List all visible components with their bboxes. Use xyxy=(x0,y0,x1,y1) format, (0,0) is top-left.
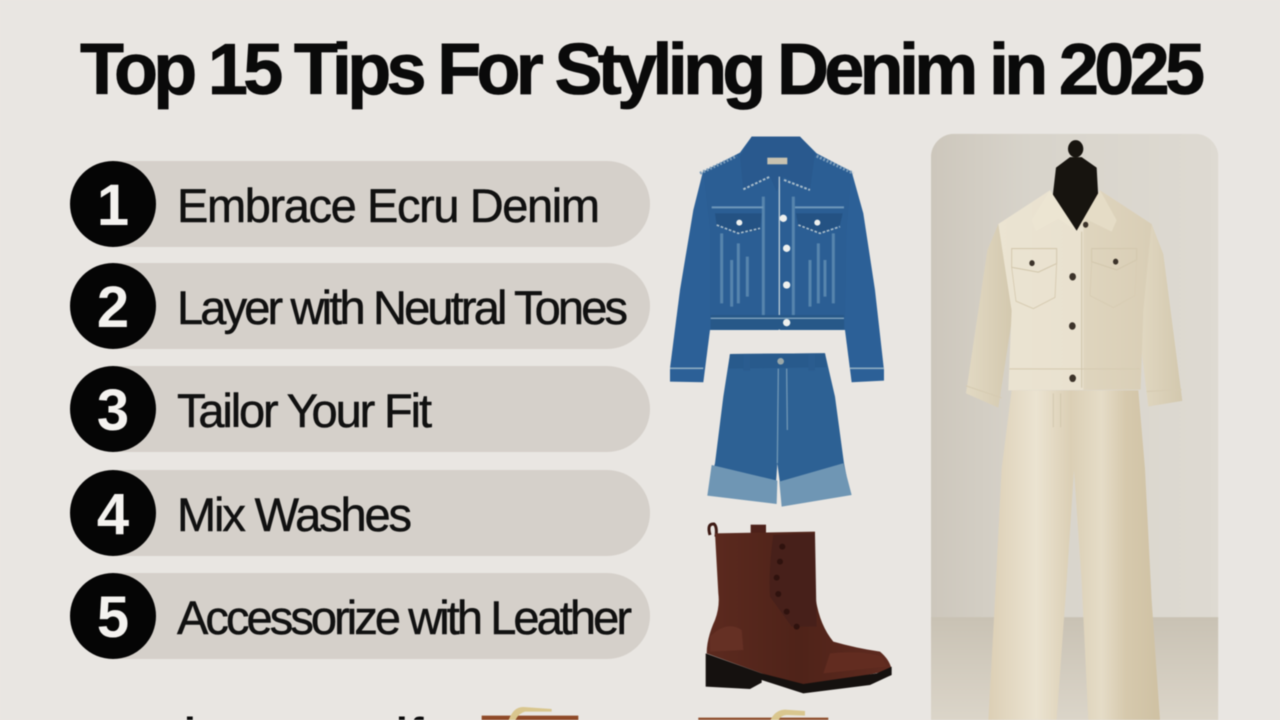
shoulder stitching xyxy=(700,156,853,173)
tip 3: 3 xyxy=(97,378,129,443)
trousers xyxy=(988,390,1160,720)
tip 2 xyxy=(70,263,650,349)
collar xyxy=(740,137,815,192)
right sleeve xyxy=(1137,224,1182,407)
photo panel: ecru denim outfit on mannequin xyxy=(931,134,1218,720)
body xyxy=(703,137,852,330)
collar xyxy=(1032,190,1077,231)
tip 5: 5 xyxy=(97,585,129,650)
mannequin neck xyxy=(1052,140,1100,231)
studio backdrop xyxy=(931,134,1218,720)
upper xyxy=(707,532,892,688)
left sleeve xyxy=(670,170,717,382)
heel and sole xyxy=(706,653,892,693)
cropped next row text, letter tops only xyxy=(170,709,425,720)
left cuff xyxy=(707,465,777,504)
tip 5 xyxy=(70,573,650,659)
tip 4: 4 xyxy=(97,482,129,547)
tip list xyxy=(70,161,650,659)
tip 1 xyxy=(70,161,650,247)
tip 1: 1 xyxy=(97,173,129,238)
tip 4 xyxy=(70,470,650,556)
yoke seams and streaks xyxy=(712,204,844,210)
right cuff xyxy=(779,463,852,507)
tip 3 xyxy=(70,366,650,452)
denim jacket xyxy=(670,137,884,382)
denim shorts xyxy=(707,353,852,507)
belt left xyxy=(482,707,578,720)
right sleeve xyxy=(838,172,884,382)
brown leather boot xyxy=(706,524,892,693)
tip 2: 2 xyxy=(97,275,129,340)
buttons xyxy=(736,215,820,326)
tip 2: Layer with Neutral Tones xyxy=(177,281,628,334)
tip 3: Tailor Your Fit xyxy=(177,384,432,437)
tip 4: Mix Washes xyxy=(177,488,412,541)
left sleeve xyxy=(966,224,1013,408)
pockets xyxy=(1012,249,1137,272)
buttons xyxy=(1029,222,1118,382)
belt right xyxy=(698,710,828,720)
tip 5: Accessorize with Leather xyxy=(177,591,632,644)
jacket body xyxy=(998,190,1152,390)
tip 1: Embrace Ecru Denim xyxy=(177,179,600,232)
title: Top 15 Tips For Styling Denim in 2025 xyxy=(80,30,1205,110)
